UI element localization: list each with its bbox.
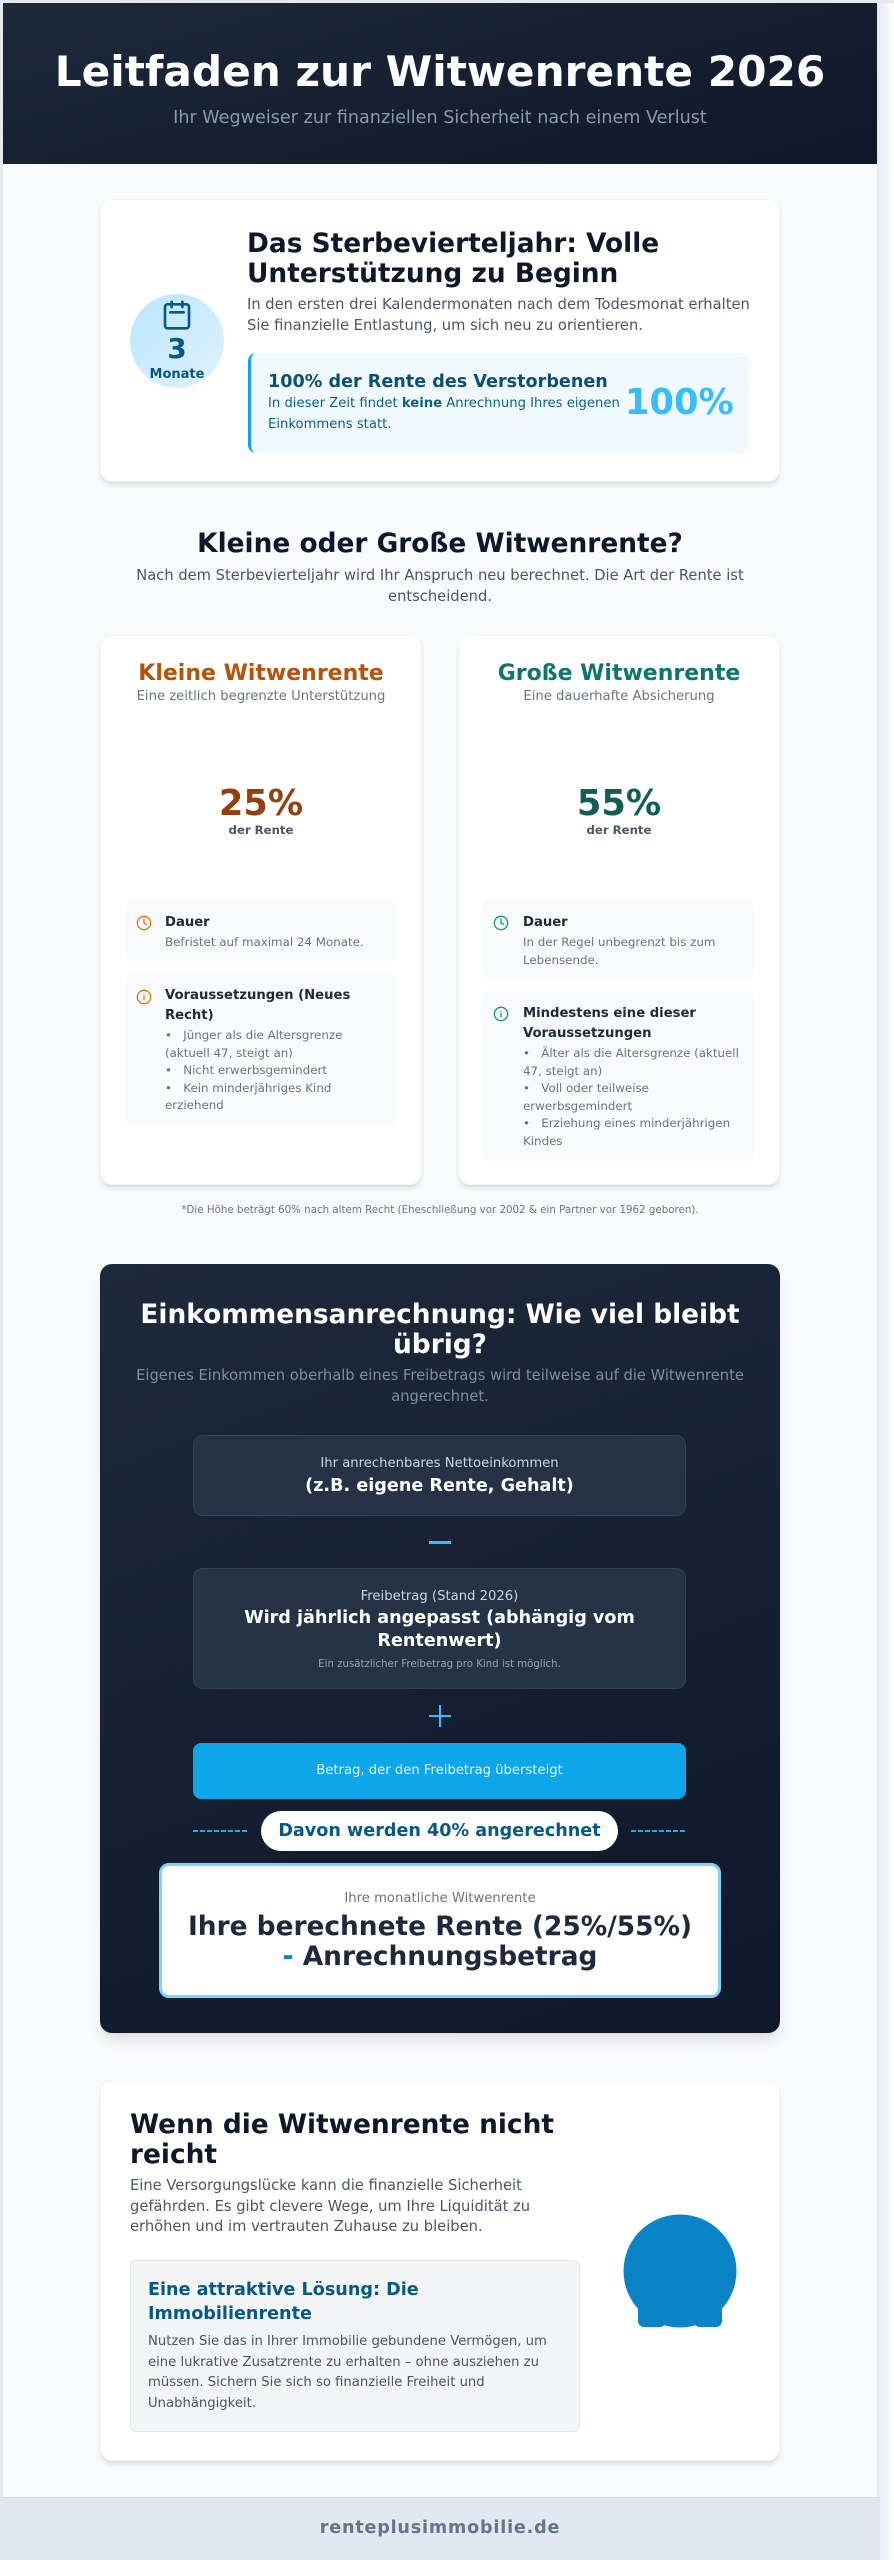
- box: result: [159, 1863, 721, 1998]
- footer: [0, 2497, 880, 2560]
- box value: (z.B. eigene Rente, Gehalt): [305, 1476, 574, 1496]
- detail list: erziehend: [165, 1098, 224, 1112]
- callout: Immobilienrente: [130, 2260, 580, 2432]
- detail list: • Voll oder teilweise: [523, 1081, 649, 1095]
- panel: Einkommensanrechnung: [100, 1264, 780, 2033]
- heading: nicht reicht: reicht: [130, 2139, 217, 2170]
- box label: Freibetrag (Stand 2026): [361, 1589, 518, 1604]
- heading: nicht reicht: [130, 2109, 554, 2170]
- detail list: • Kein minderjähriges Kind: [165, 1081, 331, 1095]
- detail list: Kindes: [523, 1134, 563, 1148]
- text: Sterbevierteljahr: In den ersten drei Kalendermonaten nach dem Todesmonat erhalten: [247, 296, 750, 313]
- detail title: Voraussetzungen (Neues: [165, 988, 350, 1003]
- card subtitle: Eine zeitlich begrenzte Unterstützung: [137, 689, 385, 704]
- detail title: [165, 988, 350, 1023]
- detail title: Recht): [165, 1008, 214, 1023]
- detail text: In der Regel unbegrenzt bis zum: [523, 935, 715, 949]
- detail: Dauer groß: [482, 900, 755, 978]
- detail: Voraussetzungen groß: [482, 991, 755, 1161]
- detail text: [523, 935, 715, 967]
- text: Sterbevierteljahr: Sie finanzielle Entlastung, um sich neu zu orientieren.: [247, 317, 643, 334]
- card title: Kleine Witwenrente: [138, 661, 384, 686]
- result label: Ihre monatliche Witwenrente: [344, 1891, 536, 1906]
- callout number: 100%: [625, 382, 734, 423]
- heading: Sterbevierteljahr: Unterstützung zu Beginn: [247, 258, 618, 289]
- detail list: • Erziehung eines minderjährigen: [523, 1116, 730, 1130]
- percentage: 55%: [577, 783, 661, 824]
- box: Nettoeinkommen: [193, 1435, 686, 1516]
- box: Freibetrag: [193, 1568, 686, 1689]
- icon: clock: [136, 916, 152, 930]
- text: intro: entscheidend.: [388, 588, 492, 605]
- callout heading: Eine attraktive Lösung: Die: [148, 2280, 419, 2300]
- icon: clock: [494, 916, 508, 930]
- detail: Voraussetzungen klein: [125, 974, 397, 1125]
- callout text: eine lukrative Zusatzrente zu erhalten – ohne ausziehen zu: [148, 2354, 539, 2370]
- percentage label: der Rente: [229, 823, 293, 837]
- percentage: 25%: [219, 783, 303, 824]
- detail text: Befristet auf maximal 24 Monate.: [165, 935, 364, 949]
- callout heading: 100% der Rente des Verstorbenen: [268, 372, 608, 392]
- callout: 100 percent: [248, 353, 749, 453]
- detail title: Dauer: [165, 915, 210, 930]
- heading: nicht reicht: Wenn die Witwenrente nicht: [130, 2109, 554, 2140]
- heading: Sterbevierteljahr: Das Sterbevierteljahr: Volle: [247, 228, 659, 259]
- heading: Sterbevierteljahr: [247, 228, 659, 289]
- percentage label: der Rente: [587, 823, 651, 837]
- footnote: *Die Höhe beträgt 60% nach altem Recht (Eheschließung vor 2002 & ein Partner vor 1962 geboren).: [181, 1204, 699, 1216]
- callout text: In dieser Zeit findet keine Anrechnung Ihres eigenen: [268, 396, 620, 411]
- card title: Große Witwenrente: [498, 661, 740, 686]
- detail list: • Nicht erwerbsgemindert: [165, 1063, 327, 1077]
- text: Versorgungslücke: [130, 2177, 530, 2235]
- panel subheading: angerechnet.: [391, 1388, 489, 1405]
- operator: minus: [429, 1541, 451, 1544]
- callout text: Nutzen Sie das in Ihrer Immobilie gebundene Vermögen, um: [148, 2334, 547, 2349]
- text: intro: Nach dem Sterbevierteljahr wird Ihr Anspruch neu berechnet. Die Art der Rente ist: [136, 567, 744, 584]
- heading: Kleine oder Große: Kleine oder Große Witwenrente?: [197, 528, 683, 559]
- panel heading: Einkommensanrechnung: Wie viel bleibt: [140, 1299, 740, 1330]
- box label: Betrag, der den Freibetrag übersteigt: [316, 1763, 563, 1778]
- detail list: erwerbsgemindert: [523, 1099, 632, 1113]
- icon: info: [494, 1006, 508, 1022]
- box label: Ihr anrechenbares Nettoeinkommen: [320, 1456, 559, 1471]
- detail list: • Jünger als die Altersgrenze: [165, 1028, 342, 1042]
- footer text: renteplusimmobilie.de: [320, 2518, 560, 2538]
- detail list: • Älter als die Altersgrenze (aktuell: [523, 1046, 739, 1060]
- detail list: (aktuell 47, steigt an): [165, 1046, 293, 1060]
- callout heading: Immobilienrente: [148, 2304, 312, 2324]
- panel heading: übrig?: [393, 1329, 487, 1360]
- callout text: [148, 2334, 547, 2410]
- unit: Monate: [150, 367, 204, 382]
- panel subheading: [136, 1367, 744, 1405]
- panel subheading: Eigenes Einkommen oberhalb eines Freibetrags wird teilweise auf die Witwenrente: [136, 1367, 744, 1384]
- icon: calendar: [164, 300, 190, 330]
- detail text: Lebensende.: [523, 953, 599, 967]
- result formula: [188, 1911, 692, 1972]
- dashed line left: [193, 1830, 249, 1832]
- panel heading: [140, 1299, 740, 1360]
- box value: [244, 1608, 635, 1651]
- callout text: müssen. Sichern Sie sich so finanzielle Freiheit und: [148, 2375, 485, 2390]
- result formula: - Anrechnungsbetrag: [283, 1941, 597, 1972]
- box: Betrag: [193, 1743, 686, 1799]
- icon: blue house blob: [624, 2214, 736, 2328]
- detail list: [523, 1046, 739, 1148]
- detail title: Mindestens eine dieser: [523, 1006, 696, 1021]
- icon: calendar badge 3 Monate: [130, 294, 224, 388]
- result formula: Ihre berechnete Rente (25%/55%): [188, 1911, 692, 1942]
- callout heading: [148, 2280, 419, 2324]
- subtitle: Ihr Wegweiser zur finanziellen Sicherheit nach einem Verlust: [173, 108, 707, 128]
- dashed line right: [631, 1830, 686, 1832]
- detail list: 47, steigt an): [523, 1064, 602, 1078]
- detail title: Voraussetzungen: [523, 1026, 652, 1041]
- panel: Große Witwenrente: [458, 635, 780, 1185]
- text: Sterbevierteljahr: [247, 296, 750, 334]
- text: Versorgungslücke: erhöhen und im vertrauten Zuhause zu bleiben.: [130, 2218, 483, 2235]
- title: Leitfaden zur Witwenrente 2026: [55, 47, 825, 96]
- operator: plus: [429, 1705, 451, 1727]
- pill: 40 percent: [261, 1811, 618, 1851]
- detail list: [165, 1028, 342, 1112]
- pill text: Davon werden 40% angerechnet: [278, 1821, 601, 1841]
- detail title: [523, 1006, 696, 1041]
- callout text: [268, 396, 620, 432]
- detail: Dauer klein: [125, 900, 397, 961]
- header: [3, 3, 877, 164]
- callout text: Einkommens statt.: [268, 417, 391, 432]
- text: intro: [136, 567, 744, 605]
- detail title: Dauer: [523, 915, 568, 930]
- panel: Sterbevierteljahr: [100, 199, 780, 482]
- panel: Wenn die Witwenrente nicht reicht: [100, 2080, 780, 2461]
- icon: info: [136, 990, 152, 1004]
- box value: Rentenwert): [377, 1631, 502, 1651]
- panel: Kleine Witwenrente: [100, 635, 422, 1185]
- text: Versorgungslücke: Eine Versorgungslücke kann die finanzielle Sicherheit: [130, 2177, 522, 2194]
- box value: Wird jährlich angepasst (abhängig vom: [244, 1608, 635, 1628]
- card subtitle: Eine dauerhafte Absicherung: [523, 689, 715, 704]
- number: 3: [167, 332, 187, 365]
- callout text: Unabhängigkeit.: [148, 2396, 256, 2410]
- box note: Ein zusätzlicher Freibetrag pro Kind ist möglich.: [318, 1659, 561, 1670]
- text: Versorgungslücke: gefährden. Es gibt clevere Wege, um Ihre Liquidität zu: [130, 2198, 530, 2214]
